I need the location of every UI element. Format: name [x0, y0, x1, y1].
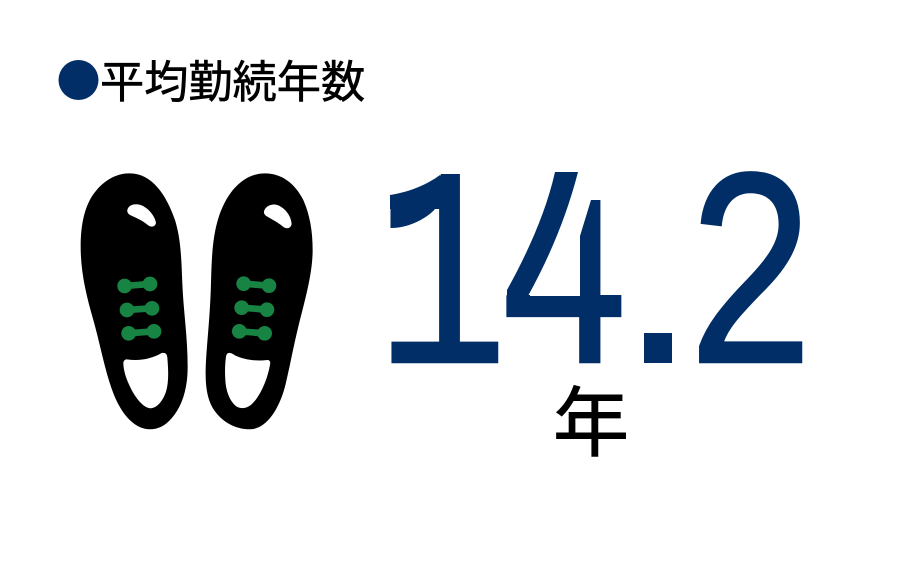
digit 1: 1 — [375, 125, 508, 448]
shoe laces — [117, 277, 161, 341]
digit 4: 4 — [496, 117, 632, 452]
heading bullet — [58, 60, 98, 100]
big number: 14.2 — [375, 117, 817, 452]
heading text: 平均勤続年数 — [100, 58, 365, 108]
decimal point — [644, 333, 672, 363]
digit 4 diagonal — [507, 172, 578, 296]
unit: years: 年 — [553, 382, 629, 467]
icon: pair of shoes — [81, 173, 313, 429]
icon: right shoe — [206, 173, 313, 429]
shoe laces — [232, 276, 276, 341]
digit 1 flag — [390, 175, 440, 209]
digit 2: 2 — [684, 125, 817, 448]
heading: average tenure — [58, 58, 365, 108]
digit 4 top notch — [530, 158, 612, 296]
icon: left shoe — [81, 173, 188, 429]
